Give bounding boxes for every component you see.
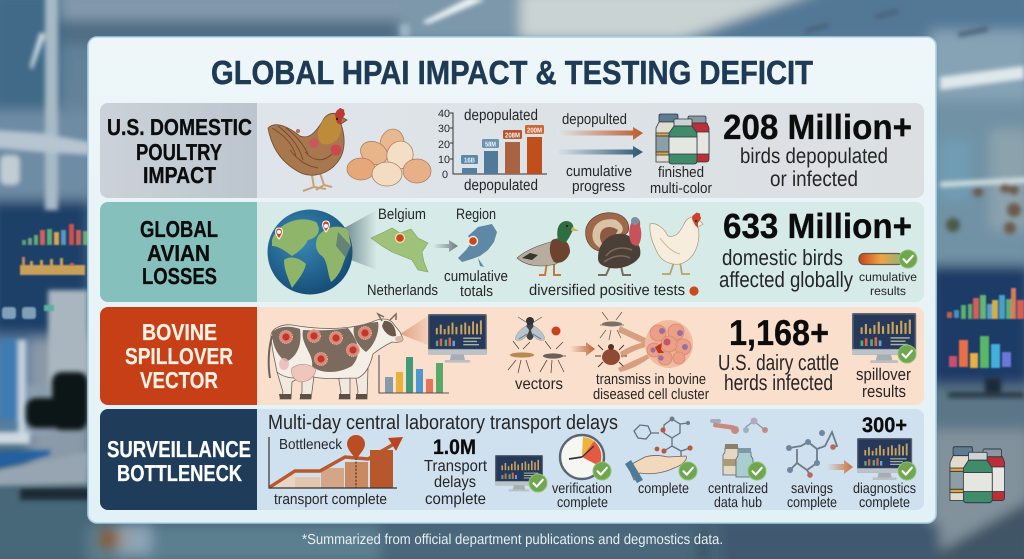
icon: white hen [650, 213, 703, 274]
progress meter: cumulative results: results [870, 284, 906, 298]
icon: finished multi-color bottles: finished [658, 164, 704, 181]
stat: 633 Million+ [719, 207, 912, 292]
icon: fly and dot [515, 317, 560, 340]
stat: 1,168+: 1,168+ [729, 312, 829, 353]
icon: verification clock: complete [557, 495, 608, 511]
icon: spillover results monitor [852, 313, 916, 401]
caption: transmission and cell cluster [593, 371, 709, 403]
stat: 1,168+: U.S. dairy cattle [718, 350, 839, 375]
stat: 633 Million+: domestic birds [722, 245, 843, 270]
cone: cow to monitor [400, 316, 428, 345]
row 3 label: BOVINE [142, 319, 217, 345]
row 2 label [100, 202, 257, 302]
stat: 633 Million+: affected globally [719, 267, 853, 292]
icon: verification clock: verification [552, 481, 612, 497]
row 4: surveillance bottleneck [100, 409, 924, 511]
left monitor charts [22, 240, 26, 245]
map: Netherlands region: cumulative [444, 268, 508, 285]
bar chart: depopulated: 20 [438, 139, 450, 151]
bar chart: depopulated: 58M [485, 142, 496, 148]
bar chart: depopulated: 30 [438, 123, 450, 135]
map: Netherlands region: totals [460, 283, 493, 300]
stat: 208 Million+ [723, 108, 912, 191]
progress meter: cumulative results: cumulative [859, 270, 917, 284]
stat and icon: 300+ diagnostics [853, 414, 916, 511]
bar chart: depopulated: 0 [442, 169, 448, 181]
row 2 label: LOSSES [142, 263, 217, 289]
caption: diversified positive tests: diversified positive tests [529, 282, 685, 299]
icon: mallard duck [517, 221, 579, 275]
map: Netherlands region [444, 206, 508, 300]
icon: sick hen [268, 108, 347, 191]
arrows: depopulated and cumulative progress [555, 111, 643, 195]
stat: 1.0M transport delays: Transport [424, 458, 488, 475]
right monitor charts [947, 312, 952, 318]
stat and icon: 300+ diagnostics: 300+ [862, 414, 907, 437]
icon: capsules and vials, centralized data hub [708, 418, 768, 511]
icon: turkey [586, 213, 641, 275]
row 1: U.S. domestic poultry [100, 103, 924, 198]
icon: capsules and vials, centralized data hub: data hub [714, 495, 762, 511]
arrows: depopulated and cumulative progress: cumulative [566, 163, 632, 180]
row 4 label: SURVEILLANCE [107, 436, 251, 462]
stat: 1.0M transport delays: complete [425, 491, 486, 508]
row 2 label: AVIAN [147, 240, 210, 266]
stat: 1,168+: herds infected [724, 370, 833, 395]
stat: 1.0M transport delays: 1.0M [433, 436, 476, 459]
stat: 633 Million+: 633 Million+ [723, 207, 912, 246]
chart: bottleneck: transport complete [274, 491, 387, 508]
icon: molecule, savings complete [786, 430, 837, 511]
progress meter: cumulative results [859, 250, 917, 298]
bar chart: depopulated: depopulated [464, 177, 538, 194]
caption: transmission and cell cluster: transmiss in bovine [596, 371, 706, 388]
arrow: Belgium to Netherlands [433, 240, 458, 252]
row 2: global avian losses [100, 202, 924, 302]
icon: capsules and vials, centralized data hub: centralized [708, 481, 768, 497]
map: Belgium: Netherlands [367, 282, 438, 299]
icon: verification clock [552, 435, 612, 511]
bar chart: depopulated: depopulated [464, 107, 538, 124]
stat: 208 Million+: or infected [770, 167, 858, 191]
footnote: *Summarized from official department publications and degmostics data. [302, 532, 723, 548]
icon: mosquito and tick to cell cluster [595, 312, 693, 372]
arrows: depopulated and cumulative progress: depopulted [562, 111, 627, 128]
row 1 label: POULTRY [136, 139, 222, 165]
icon: transport monitor [495, 455, 547, 492]
caption: transmission and cell cluster: diseased cell cluster [593, 386, 709, 403]
row 1 label: IMPACT [143, 162, 216, 188]
stat: 208 Million+: 208 Million+ [723, 108, 912, 147]
icon: infected dairy cow [269, 314, 403, 399]
chart: bottleneck: Bottleneck [279, 437, 343, 453]
row 4 label [100, 409, 257, 510]
bar chart: depopulated: 208M [505, 132, 520, 140]
caption: vectors: vectors [515, 376, 563, 393]
main panel [88, 37, 936, 523]
stat and icon: 300+ diagnostics: diagnostics [853, 481, 916, 497]
row 3: bovine spillover [100, 307, 924, 405]
heading: transport delays: Multi-day central laboratory transport delays [268, 411, 618, 434]
chart: bottleneck [269, 435, 403, 508]
icon: dashboard monitor [428, 314, 487, 363]
icon: finished multi-color bottles [650, 114, 712, 197]
icon: hand with molecule [625, 416, 697, 497]
title: GLOBAL HPAI IMPACT & TESTING DEFICIT [211, 55, 813, 92]
arrow: vectors to transmission [570, 342, 595, 356]
arrow: savings to diagnostics [827, 460, 853, 474]
row 3 label [100, 307, 257, 405]
row 3 label: VECTOR [140, 367, 218, 393]
icon: hand with molecule: complete [638, 481, 689, 497]
row 3 label: SPILLOVER [125, 343, 233, 369]
icon: spillover results monitor: spillover [856, 365, 911, 384]
stat and icon: 300+ diagnostics: complete [859, 495, 910, 511]
bar chart: depopulated [438, 107, 547, 194]
icon: finished multi-color bottles: multi-color [650, 180, 712, 197]
map: Belgium [367, 206, 438, 299]
row 1 label: U.S. DOMESTIC [107, 114, 252, 140]
bar chart: cow data [379, 355, 449, 393]
icon: spillover results monitor: results [862, 382, 906, 401]
stat: 1.0M transport delays [424, 436, 488, 508]
arrows: depopulated and cumulative progress: progress [572, 178, 625, 195]
row 1 label [100, 103, 257, 198]
row 4 label: BOTTLENECK [117, 460, 242, 486]
icon: molecule, savings complete: complete [787, 495, 837, 511]
bar chart: depopulated: 200M [527, 128, 542, 134]
bar chart: depopulated: 10 [438, 154, 450, 166]
stat: 208 Million+: birds depopulated [740, 144, 888, 168]
icon: molecule, savings complete: savings [791, 481, 833, 497]
bar chart: depopulated: 16B [464, 158, 475, 164]
stat: 1.0M transport delays: delays [434, 474, 476, 491]
bar chart: depopulated: 40 [438, 108, 450, 120]
map: Belgium: Belgium [378, 206, 426, 223]
row 2 label: GLOBAL [140, 216, 218, 242]
stat: 1,168+ [718, 312, 839, 395]
icon: globe with zoom beam [268, 210, 377, 294]
decorative bottles: lower right [950, 447, 1005, 503]
map: Netherlands region: Region [456, 206, 496, 223]
icon: eggs [347, 127, 431, 186]
icon: mosquitoes [508, 341, 566, 373]
